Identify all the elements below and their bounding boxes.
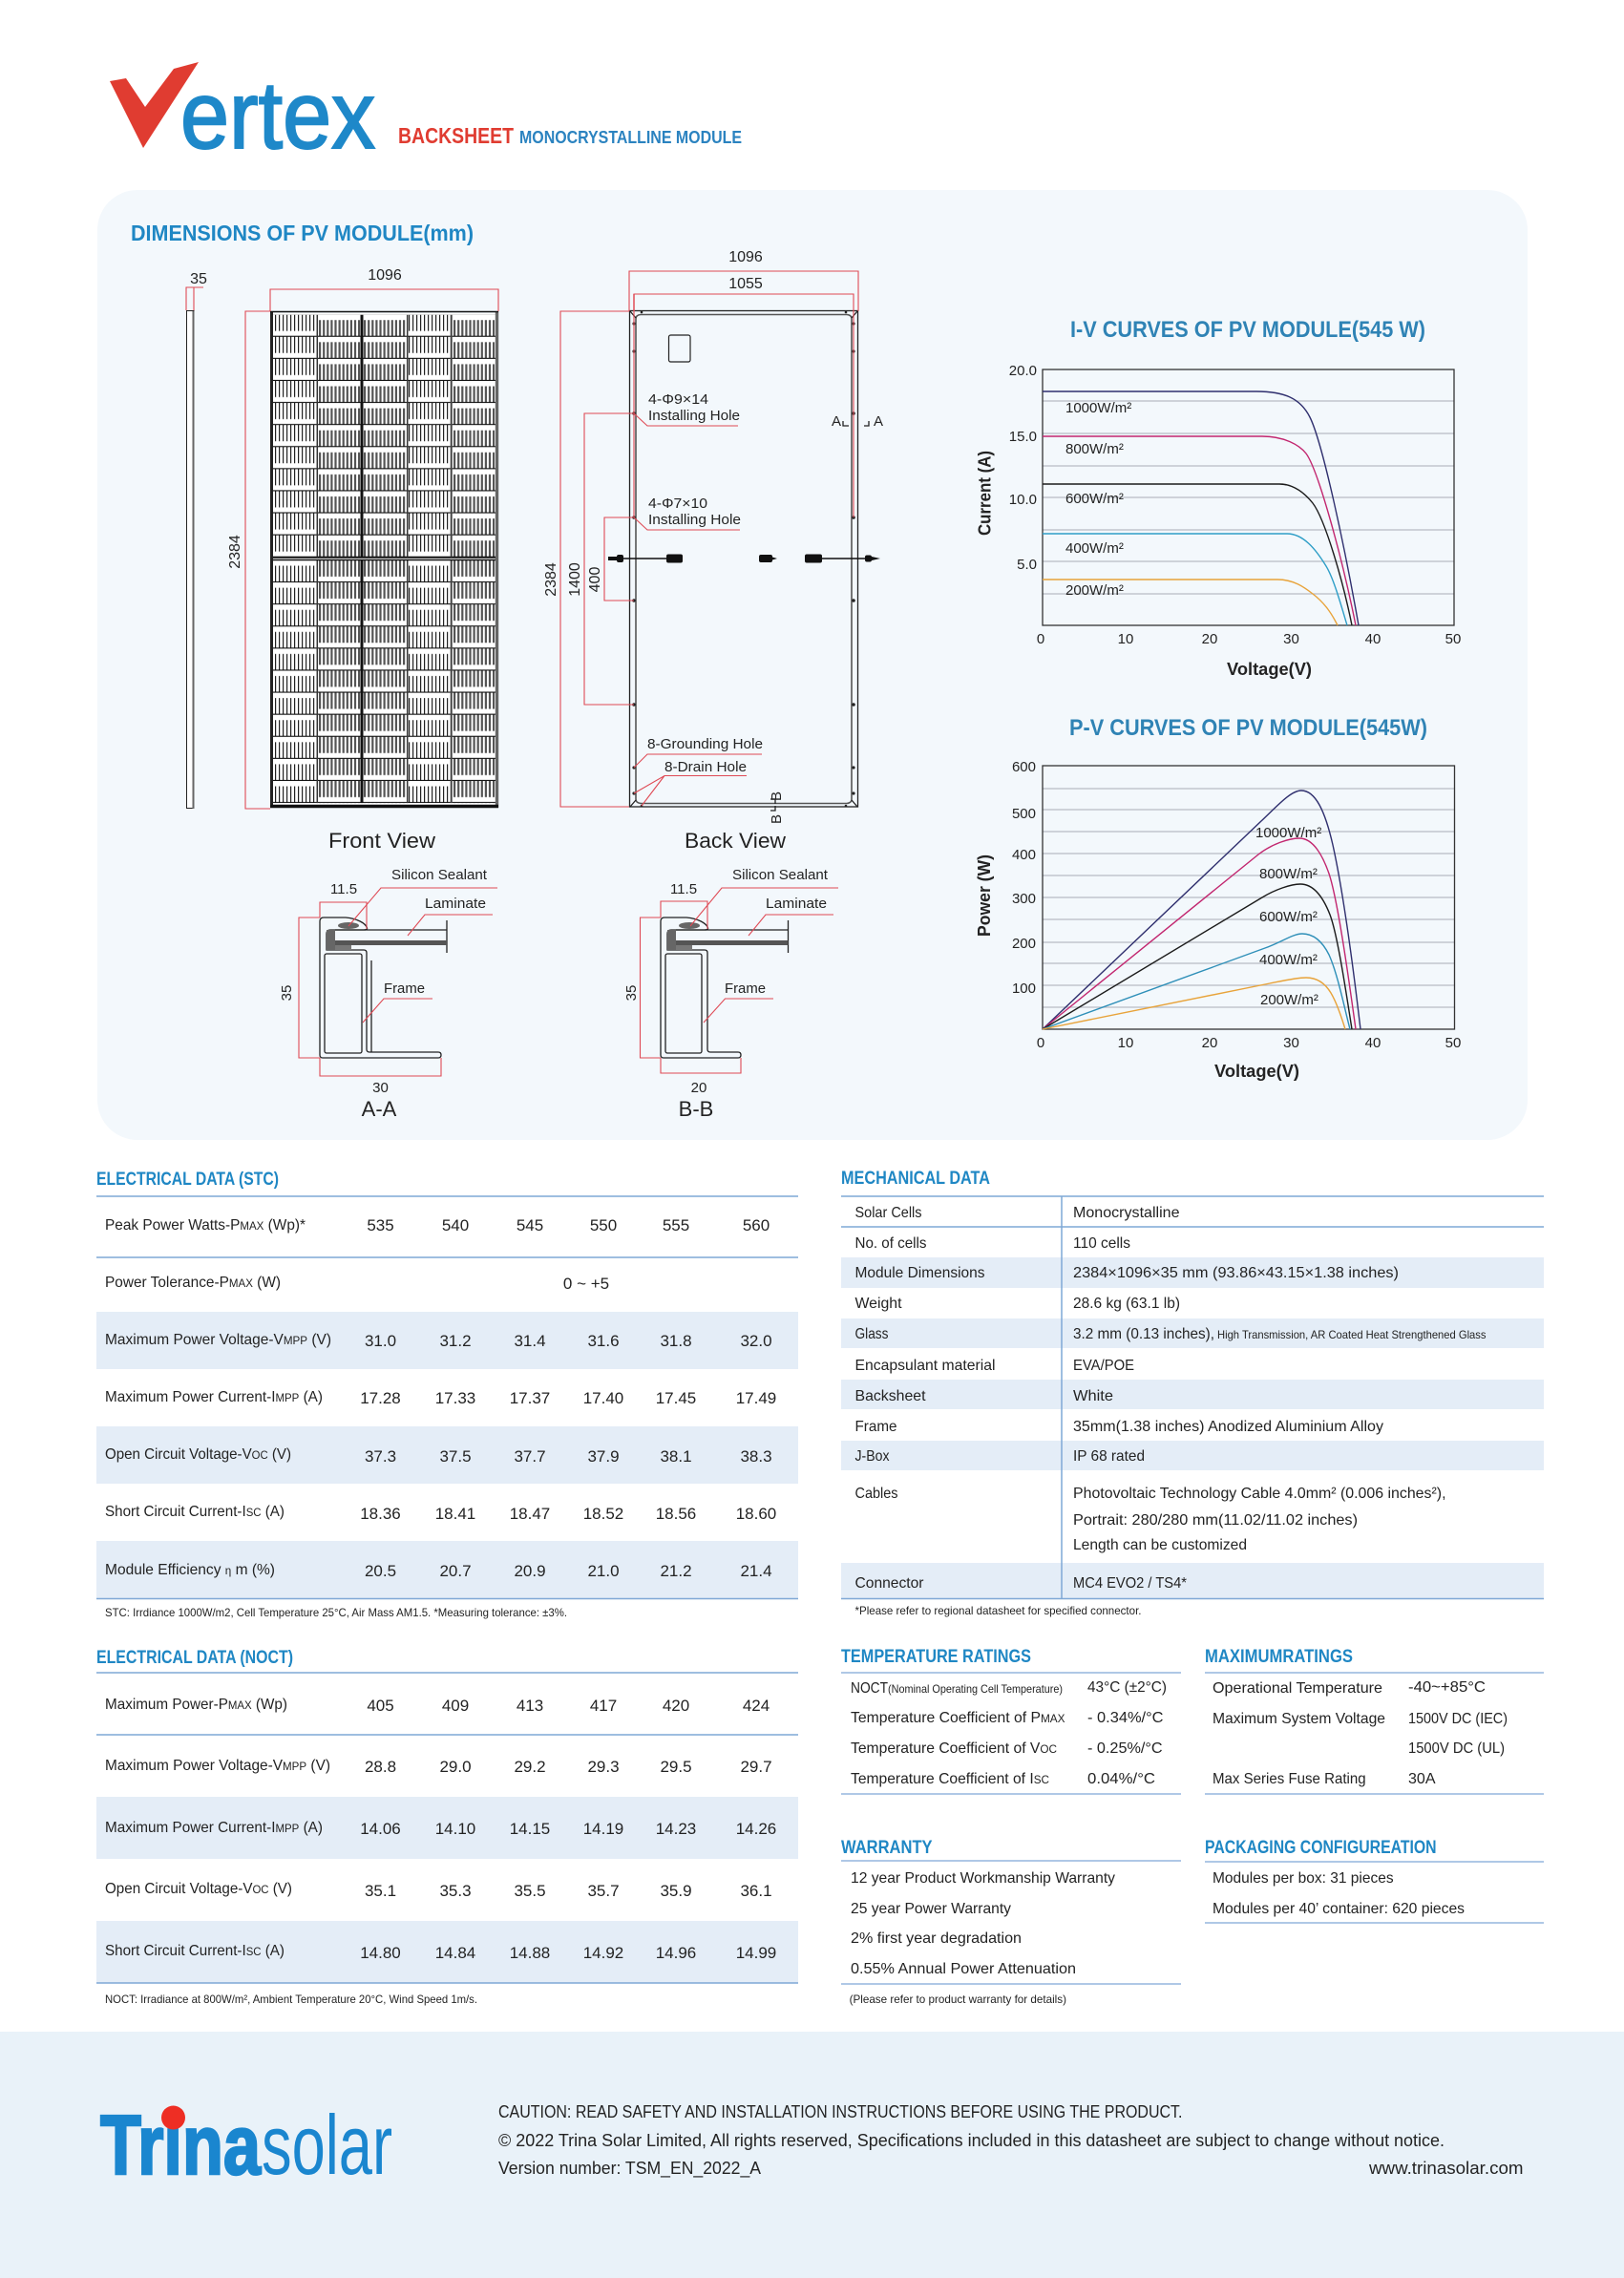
table: electrical data NOCT	[96, 1648, 798, 2006]
table: electrical data STC: 17.49	[736, 1389, 776, 1407]
footnote: STC conditions: STC: Irrdiance 1000W/m2, Cell Temperature 25°C, Air Mass AM1.5. *Measuring tolerance: ±3%.	[105, 1606, 567, 1619]
table: electrical data STC: Open Circuit Voltage-VOC (V)	[105, 1446, 291, 1463]
logo: Trina solar: solar	[262, 2098, 392, 2192]
table: warranty: WARRANTY	[841, 1838, 933, 1858]
table: electrical data NOCT: 29.0	[439, 1758, 472, 1776]
side view drawing: 35	[190, 271, 207, 287]
chart: P-V curves: 40	[1365, 1035, 1381, 1051]
panel: dimensions and curves	[97, 190, 1528, 1140]
heading: I-V curves: I-V CURVES OF PV MODULE(545 W)	[1070, 317, 1425, 343]
front view drawing: 2384	[227, 535, 243, 569]
table: mechanical data: 2384×1096×35 mm (93.86×43.15×1.38 inches)	[1073, 1265, 1399, 1281]
chart: P-V curves: 20	[1202, 1035, 1217, 1051]
logo: Vertex: ertex	[180, 62, 375, 169]
table: electrical data STC: Peak Power Watts-PMAX (Wp)*	[105, 1217, 306, 1234]
section marks A and B	[769, 413, 883, 824]
table: electrical data NOCT: 424	[743, 1697, 770, 1715]
table: mechanical data: No. of cells	[855, 1235, 926, 1252]
table: electrical data NOCT: Maximum Power-PMAX (Wp)	[105, 1697, 287, 1713]
back view drawing: Installing Hole	[648, 408, 740, 424]
dimension lines	[629, 271, 858, 311]
table: maximum ratings: -40~+85°C	[1408, 1679, 1486, 1696]
table: electrical data STC: 18.36	[360, 1505, 401, 1523]
chart: I-V curves: 20.0	[1009, 363, 1037, 379]
table: electrical data STC: 21.0	[587, 1562, 620, 1580]
table: electrical data NOCT: 420	[663, 1697, 689, 1715]
chart: I-V curves: 10	[1118, 631, 1133, 647]
chart: I-V curves: 200W/m²	[1065, 582, 1124, 599]
chart: I-V curves: 1000W/m²	[1065, 400, 1131, 416]
chart: P-V curves: 400W/m²	[1259, 952, 1318, 968]
table: temperature ratings: Temperature Coefficient of PMAX	[851, 1710, 1065, 1726]
table: electrical data STC: 32.0	[740, 1332, 772, 1350]
table: temperature ratings	[841, 1647, 1181, 1794]
footer text: caution and copyright: Version number: TSM_EN_2022_A	[498, 2159, 761, 2179]
table: electrical data NOCT: 29.2	[514, 1758, 546, 1776]
table: electrical data STC: 555	[663, 1216, 689, 1234]
table: packaging configuration: Modules per box: 31 pieces	[1213, 1870, 1394, 1887]
subtitle: backsheet monocrystalline module	[398, 123, 742, 148]
heading: mechanical data: MECHANICAL DATA	[841, 1169, 990, 1189]
table: temperature ratings: 43°C (±2°C)	[1087, 1679, 1167, 1696]
table: warranty: 0.55% Annual Power Attenuation	[851, 1961, 1076, 1977]
table: electrical data STC: 17.28	[360, 1389, 401, 1407]
table: electrical data NOCT: 405	[367, 1697, 394, 1715]
chart: P-V curves: 400	[1012, 847, 1036, 863]
chart: I-V curves: 400W/m²	[1065, 540, 1124, 557]
table: warranty: 12 year Product Workmanship Warranty	[851, 1870, 1115, 1887]
footnote: NOCT conditions: NOCT: Irradiance at 800W/m², Ambient Temperature 20°C, Wind Speed 1m/s.	[105, 1993, 477, 2006]
subtitle: backsheet monocrystalline module: BACKSHEET	[398, 123, 514, 148]
section B-B drawing: Laminate	[766, 896, 827, 912]
table: electrical data NOCT: 409	[442, 1697, 469, 1715]
chart: P-V curves: 800W/m²	[1259, 866, 1318, 882]
table: temperature ratings: NOCT	[851, 1680, 888, 1697]
table: electrical data NOCT: 28.8	[365, 1758, 396, 1776]
heading: electrical data NOCT: ELECTRICAL DATA (NOCT)	[96, 1648, 293, 1668]
table: electrical data NOCT: 29.3	[587, 1758, 620, 1776]
section B-B drawing: 11.5	[670, 881, 697, 897]
table: electrical data STC: 38.1	[660, 1447, 692, 1466]
table: temperature ratings: - 0.34%/°C	[1087, 1710, 1163, 1726]
table: temperature ratings: - 0.25%/°C	[1087, 1740, 1163, 1757]
back view drawing: 400	[587, 567, 603, 592]
table: electrical data STC: 18.56	[656, 1505, 696, 1523]
heading: dimensions: DIMENSIONS OF PV MODULE(mm)	[131, 221, 474, 245]
table: electrical data STC: 37.3	[365, 1447, 396, 1466]
table: temperature ratings: (Nominal Operating Cell Temperature)	[888, 1682, 1063, 1696]
table: electrical data STC: 550	[590, 1216, 617, 1234]
table: maximum ratings: 1500V DC (IEC)	[1408, 1711, 1508, 1727]
back view drawing: 4-Φ7×10	[648, 496, 707, 512]
table: mechanical data: Glass	[855, 1326, 888, 1342]
table: electrical data STC: 17.45	[656, 1389, 696, 1407]
table: electrical data STC	[96, 1170, 798, 1619]
table: temperature ratings: Temperature Coefficient of ISC	[851, 1771, 1049, 1787]
chart: I-V curves: 40	[1365, 631, 1381, 647]
chart: I-V curves: 20	[1202, 631, 1217, 647]
chart: P-V curves: 50	[1445, 1035, 1461, 1051]
table: mechanical data: MC4 EVO2 / TS4*	[1073, 1575, 1187, 1592]
table: electrical data NOCT: 14.88	[510, 1944, 550, 1962]
logo: Vertex	[110, 62, 375, 169]
table: electrical data STC: 31.0	[365, 1332, 396, 1350]
chart: I-V curves: 30	[1283, 631, 1299, 647]
table: maximum ratings: Maximum System Voltage	[1213, 1711, 1385, 1727]
table: electrical data STC: 535	[367, 1216, 394, 1234]
table: mechanical data: Length can be customized	[1073, 1537, 1247, 1553]
table: mechanical data: 110 cells	[1073, 1235, 1130, 1252]
table: mechanical data: Solar Cells	[855, 1205, 922, 1221]
table: electrical data NOCT: 29.7	[740, 1758, 772, 1776]
chart: I-V curves: 15.0	[1009, 429, 1037, 445]
table: mechanical data: IP 68 rated	[1073, 1448, 1145, 1465]
table: mechanical data: Cables	[855, 1486, 897, 1502]
back view drawing: 4-Φ9×14	[648, 391, 708, 408]
table: mechanical data: J-Box	[855, 1448, 890, 1465]
section A-A drawing: Laminate	[425, 896, 486, 912]
table: mechanical data: 35mm(1.38 inches) Anodized Aluminium Alloy	[1073, 1419, 1383, 1435]
chart: P-V curves: 200W/m²	[1260, 992, 1318, 1008]
back view drawing: 8-Drain Hole	[664, 759, 747, 775]
chart: I-V curves: 5.0	[1017, 557, 1037, 573]
chart: P-V curves: 600W/m²	[1259, 909, 1318, 925]
chart: I-V curves: 600W/m²	[1065, 491, 1124, 507]
chart: I-V curves: 800W/m²	[1065, 441, 1124, 457]
table: temperature ratings: Temperature Coefficient of VOC	[851, 1740, 1057, 1757]
table: mechanical data	[841, 1169, 1544, 1617]
table: electrical data NOCT: Maximum Power Voltage-VMPP (V)	[105, 1758, 330, 1774]
table: electrical data STC: 18.52	[583, 1505, 623, 1523]
table: electrical data STC: 17.33	[435, 1389, 475, 1407]
footnote: connector: *Please refer to regional datasheet for specified connector.	[855, 1604, 1142, 1617]
table: mechanical data: Connector	[855, 1575, 924, 1592]
table: electrical data NOCT: 29.5	[660, 1758, 692, 1776]
table: electrical data NOCT: 35.1	[365, 1882, 396, 1900]
table: electrical data NOCT: Short Circuit Current-ISC (A)	[105, 1943, 285, 1959]
table: electrical data STC: 18.41	[435, 1505, 475, 1523]
front view drawing: 1096	[368, 267, 402, 284]
heading: P-V curves: P-V CURVES OF PV MODULE(545W)	[1069, 715, 1427, 741]
section marks A and B: B	[769, 791, 785, 801]
table: mechanical data: Photovoltaic Technology Cable 4.0mm² (0.006 inches²),	[1073, 1486, 1445, 1502]
table: electrical data NOCT: 14.26	[736, 1820, 776, 1838]
chart: P-V curves: 30	[1283, 1035, 1299, 1051]
table: mechanical data: Frame	[855, 1419, 897, 1435]
table: electrical data STC: 37.7	[514, 1447, 546, 1466]
table: electrical data NOCT: 35.9	[660, 1882, 692, 1900]
back view drawing: 1096	[728, 249, 763, 265]
table: electrical data STC: Short Circuit Current-ISC (A)	[105, 1504, 285, 1520]
label: back view: Back View	[685, 829, 786, 853]
subtitle: backsheet monocrystalline module: MONOCRYSTALLINE MODULE	[519, 128, 742, 147]
table: electrical data NOCT: 14.19	[583, 1820, 623, 1838]
chart: P-V curves: 500	[1012, 806, 1036, 822]
section B-B drawing: B-B	[679, 1097, 713, 1121]
section marks A and B: B	[769, 814, 785, 824]
table: mechanical data: 28.6 kg (63.1 lb)	[1073, 1296, 1180, 1312]
table: electrical data STC: 20.9	[514, 1562, 546, 1580]
table: electrical data NOCT: 14.10	[435, 1820, 475, 1838]
footer text: caution and copyright: www.trinasolar.com	[1368, 2159, 1524, 2178]
section A-A drawing: 11.5	[330, 881, 357, 897]
section B-B drawing: 20	[691, 1080, 707, 1096]
chart: I-V curves: 50	[1445, 631, 1461, 647]
table: electrical data NOCT: 413	[517, 1697, 543, 1715]
table: electrical data STC: 18.47	[510, 1505, 550, 1523]
table: electrical data STC: 37.5	[439, 1447, 472, 1466]
heading: electrical data STC: ELECTRICAL DATA (STC)	[96, 1170, 279, 1190]
chart: I-V curves: Current (A)	[976, 451, 995, 536]
back view drawing: 8-Grounding Hole	[647, 736, 763, 752]
logo: Trina solar	[100, 2098, 392, 2192]
back view drawing: 2384	[543, 562, 559, 597]
table: electrical data STC: 31.8	[660, 1332, 692, 1350]
section B-B drawing: 35	[623, 985, 640, 1001]
table: electrical data NOCT: 35.7	[587, 1882, 620, 1900]
table: electrical data STC: 545	[517, 1216, 543, 1234]
table: mechanical data: 3.2 mm (0.13 inches),	[1073, 1326, 1214, 1342]
chart: P-V curves: 0	[1037, 1035, 1044, 1051]
table: packaging configuration: Modules per 40’ container: 620 pieces	[1213, 1901, 1465, 1917]
section A-A drawing	[279, 867, 497, 1121]
table: electrical data STC: 17.37	[510, 1389, 550, 1407]
table: electrical data STC: Power Tolerance-PMAX (W)	[105, 1275, 281, 1291]
table: electrical data NOCT: 14.80	[360, 1944, 401, 1962]
cables and connectors	[608, 554, 880, 563]
table: electrical data NOCT: 14.06	[360, 1820, 401, 1838]
table: electrical data STC: 20.5	[365, 1562, 396, 1580]
table: electrical data STC: 17.40	[583, 1389, 623, 1407]
chart: I-V curves: 0	[1037, 631, 1044, 647]
footer text: caution and copyright	[498, 2102, 1524, 2179]
back view drawing: Installing Hole	[648, 512, 741, 528]
chart: P-V curves: 600	[1012, 759, 1036, 775]
table: electrical data NOCT: Open Circuit Voltage-VOC (V)	[105, 1881, 292, 1897]
table: electrical data STC: 20.7	[439, 1562, 472, 1580]
table: mechanical data: Monocrystalline	[1073, 1205, 1180, 1221]
table: electrical data STC: Maximum Power Voltage-VMPP (V)	[105, 1332, 331, 1348]
table: maximum ratings: Max Series Fuse Rating	[1213, 1771, 1366, 1787]
table: electrical data STC: 31.6	[587, 1332, 620, 1350]
section B-B drawing	[623, 867, 838, 1121]
section A-A drawing: A-A	[362, 1097, 397, 1121]
table: mechanical data: Backsheet	[855, 1388, 926, 1404]
table: electrical data NOCT: 14.23	[656, 1820, 696, 1838]
table: electrical data NOCT: 14.92	[583, 1944, 623, 1962]
table: mechanical data: High Transmission, AR Coated Heat Strengthened Glass	[1217, 1328, 1486, 1341]
table: electrical data NOCT: 14.84	[435, 1944, 475, 1962]
front view drawing	[227, 267, 498, 809]
chart: P-V curves: 10	[1118, 1035, 1133, 1051]
footer text: caution and copyright: CAUTION: READ SAFETY AND INSTALLATION INSTRUCTIONS BEFORE USING THE PRODUCT.	[498, 2102, 1182, 2121]
table: electrical data NOCT: 35.3	[439, 1882, 472, 1900]
table: packaging configuration	[1205, 1838, 1544, 1923]
table: electrical data STC: 560	[743, 1216, 770, 1234]
section A-A drawing: Frame	[384, 981, 425, 997]
chart: P-V curves: Voltage(V)	[1214, 1062, 1299, 1081]
table: electrical data STC: 21.2	[660, 1562, 692, 1580]
chart: P-V curves	[975, 759, 1461, 1081]
chart: I-V curves: 10.0	[1009, 492, 1037, 508]
table: electrical data NOCT: 417	[590, 1697, 617, 1715]
table: electrical data STC: Module Efficiency η m (%)	[105, 1562, 275, 1578]
table: maximum ratings: 1500V DC (UL)	[1408, 1740, 1505, 1757]
table: mechanical data: Encapsulant material	[855, 1358, 995, 1374]
table: electrical data NOCT: 14.99	[736, 1944, 776, 1962]
table: temperature ratings: 0.04%/°C	[1087, 1771, 1155, 1787]
table: warranty: 25 year Power Warranty	[851, 1901, 1011, 1917]
table: mechanical data: EVA/POE	[1073, 1358, 1134, 1374]
table: maximum ratings: 30A	[1408, 1771, 1436, 1787]
footer text: caution and copyright: © 2022 Trina Solar Limited, All rights reserved, Specifications included in this datasheet are subject to change without notice.	[498, 2131, 1445, 2150]
section A-A drawing: Silicon Sealant	[391, 867, 488, 883]
section B-B drawing: Frame	[725, 981, 766, 997]
table: maximum ratings	[1205, 1647, 1544, 1794]
table: electrical data NOCT: Maximum Power Current-IMPP (A)	[105, 1820, 323, 1836]
table: mechanical data: Weight	[855, 1296, 902, 1312]
back view drawing: 1055	[728, 276, 763, 292]
back view drawing	[543, 249, 883, 824]
table: electrical data STC: 31.2	[439, 1332, 472, 1350]
side view drawing	[186, 271, 207, 809]
section B-B drawing: Silicon Sealant	[732, 867, 829, 883]
table: electrical data NOCT: 14.15	[510, 1820, 550, 1838]
table: electrical data STC: 38.3	[740, 1447, 772, 1466]
table: maximum ratings: Operational Temperature	[1213, 1680, 1382, 1697]
table: maximum ratings: MAXIMUMRATINGS	[1205, 1647, 1353, 1667]
table: packaging configuration: PACKAGING CONFIGUREATION	[1205, 1838, 1437, 1858]
section marks A and B: A	[874, 413, 883, 430]
label: front view: Front View	[328, 829, 435, 853]
chart: P-V curves: Power (W)	[975, 854, 994, 937]
table: warranty	[841, 1838, 1181, 2006]
section A-A drawing: 30	[372, 1080, 389, 1096]
chart: P-V curves: 100	[1012, 981, 1036, 997]
table: electrical data STC: 0 ~ +5	[563, 1275, 609, 1293]
section marks A and B: A	[832, 413, 841, 430]
back view drawing: 1400	[567, 562, 583, 597]
chart: P-V curves: 300	[1012, 891, 1036, 907]
table: electrical data STC: Maximum Power Current-IMPP (A)	[105, 1389, 323, 1405]
table: warranty: 2% first year degradation	[851, 1930, 1022, 1947]
table: electrical data STC: 37.9	[587, 1447, 620, 1466]
table: electrical data STC: 21.4	[740, 1562, 772, 1580]
chart: I-V curves: Voltage(V)	[1227, 660, 1312, 679]
section A-A drawing: 35	[279, 985, 295, 1001]
table: electrical data STC: 18.60	[736, 1505, 776, 1523]
table: electrical data STC: 540	[442, 1216, 469, 1234]
table: electrical data NOCT: 35.5	[514, 1882, 546, 1900]
table: mechanical data: White	[1073, 1388, 1113, 1404]
table: electrical data STC: 31.4	[514, 1332, 546, 1350]
footer band	[0, 2032, 1624, 2278]
table: electrical data NOCT: 36.1	[740, 1882, 772, 1900]
chart: P-V curves: 1000W/m²	[1255, 825, 1321, 841]
table: warranty: (Please refer to product warranty for details)	[850, 1993, 1066, 2006]
logo: Trina solar: Trina	[100, 2098, 262, 2192]
table: mechanical data: Portrait: 280/280 mm(11.02/11.02 inches)	[1073, 1512, 1358, 1529]
table: temperature ratings: TEMPERATURE RATINGS	[841, 1647, 1031, 1667]
chart: P-V curves: 200	[1012, 936, 1036, 952]
table: electrical data NOCT: 14.96	[656, 1944, 696, 1962]
table: mechanical data: Module Dimensions	[855, 1265, 985, 1281]
chart: I-V curves	[976, 363, 1461, 679]
